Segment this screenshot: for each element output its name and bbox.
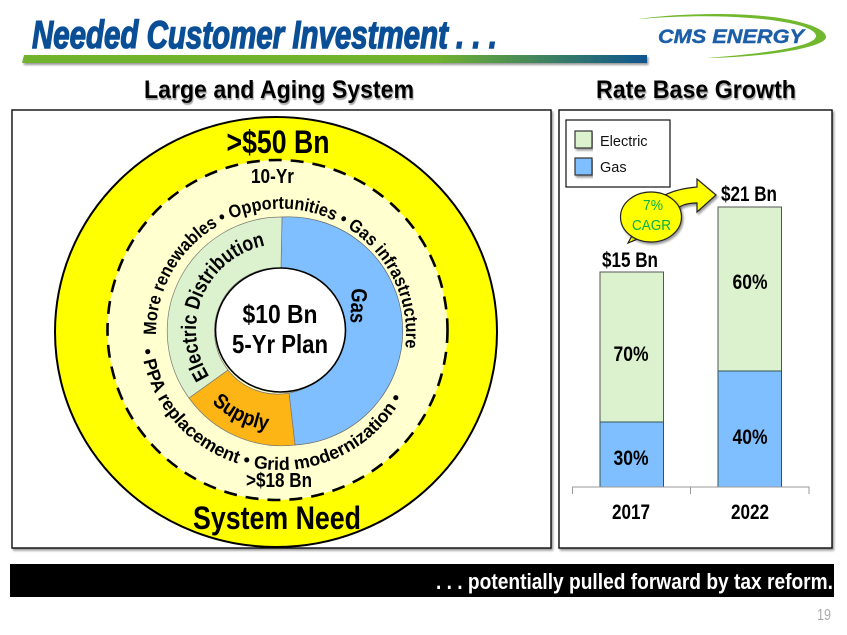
donut segment: electric distribution [167, 217, 282, 398]
label: >$50 Bn: >$50 Bn [226, 124, 330, 160]
arrow: growth [665, 179, 716, 212]
bar 2017 [600, 272, 664, 487]
dashed circle: 10-year opportunities [108, 160, 448, 500]
bar 2022 [718, 207, 782, 487]
label: System Need: System Need [193, 500, 361, 536]
logo: CMS Energy: CMS ENERGY [658, 27, 807, 48]
legend [566, 120, 670, 187]
axis label 2022: 2022 [731, 501, 769, 524]
bar 2022: 60% [732, 271, 768, 294]
panel: rate base growth [559, 110, 832, 548]
bar 2017: 30% [614, 447, 649, 470]
legend: Electric [600, 134, 648, 150]
panel: large and aging system [11, 109, 554, 552]
title: Needed Customer Investment . . . [32, 14, 497, 57]
label: Supply: Supply [214, 394, 270, 433]
ring text: bottom: • PPA replacement • Grid modernization • [144, 349, 398, 470]
heading: Large and Aging System: Large and Aging System [144, 76, 414, 104]
axis [572, 487, 809, 494]
ring text: top: More renewables • Opportunities • Gas infrastructure [144, 197, 418, 348]
page number: 19 [817, 607, 831, 624]
bar 2022: 40% [732, 426, 768, 449]
heading: Rate Base Growth: Rate Base Growth [596, 76, 796, 104]
callout: 7% CAGR: 7% [643, 198, 663, 214]
axis label 2017: 2017 [612, 501, 650, 524]
title rule [22, 55, 647, 63]
bar 2017: 70% [614, 343, 649, 366]
donut segment: gas [281, 217, 403, 445]
donut segment: supply [189, 370, 295, 446]
total label $15 Bn: $15 Bn [602, 249, 658, 272]
outer circle: system need [55, 117, 497, 547]
label: $10 Bn: $10 Bn [242, 299, 318, 329]
label: 5-Yr Plan: 5-Yr Plan [232, 329, 328, 359]
callout: 7% CAGR: CAGR [632, 218, 671, 234]
logo: CMS Energy [638, 14, 826, 58]
label: Gas: Gas [345, 288, 372, 324]
label: 10-Yr: 10-Yr [251, 166, 294, 188]
total label $21 Bn: $21 Bn [721, 183, 777, 206]
label: >$18 Bn: >$18 Bn [246, 470, 312, 492]
banner [10, 564, 834, 597]
callout: 7% CAGR [620, 192, 682, 243]
legend: Gas [600, 160, 627, 176]
centre circle [216, 268, 346, 392]
label: Electric Distribution: Electric Distribution [180, 236, 264, 382]
